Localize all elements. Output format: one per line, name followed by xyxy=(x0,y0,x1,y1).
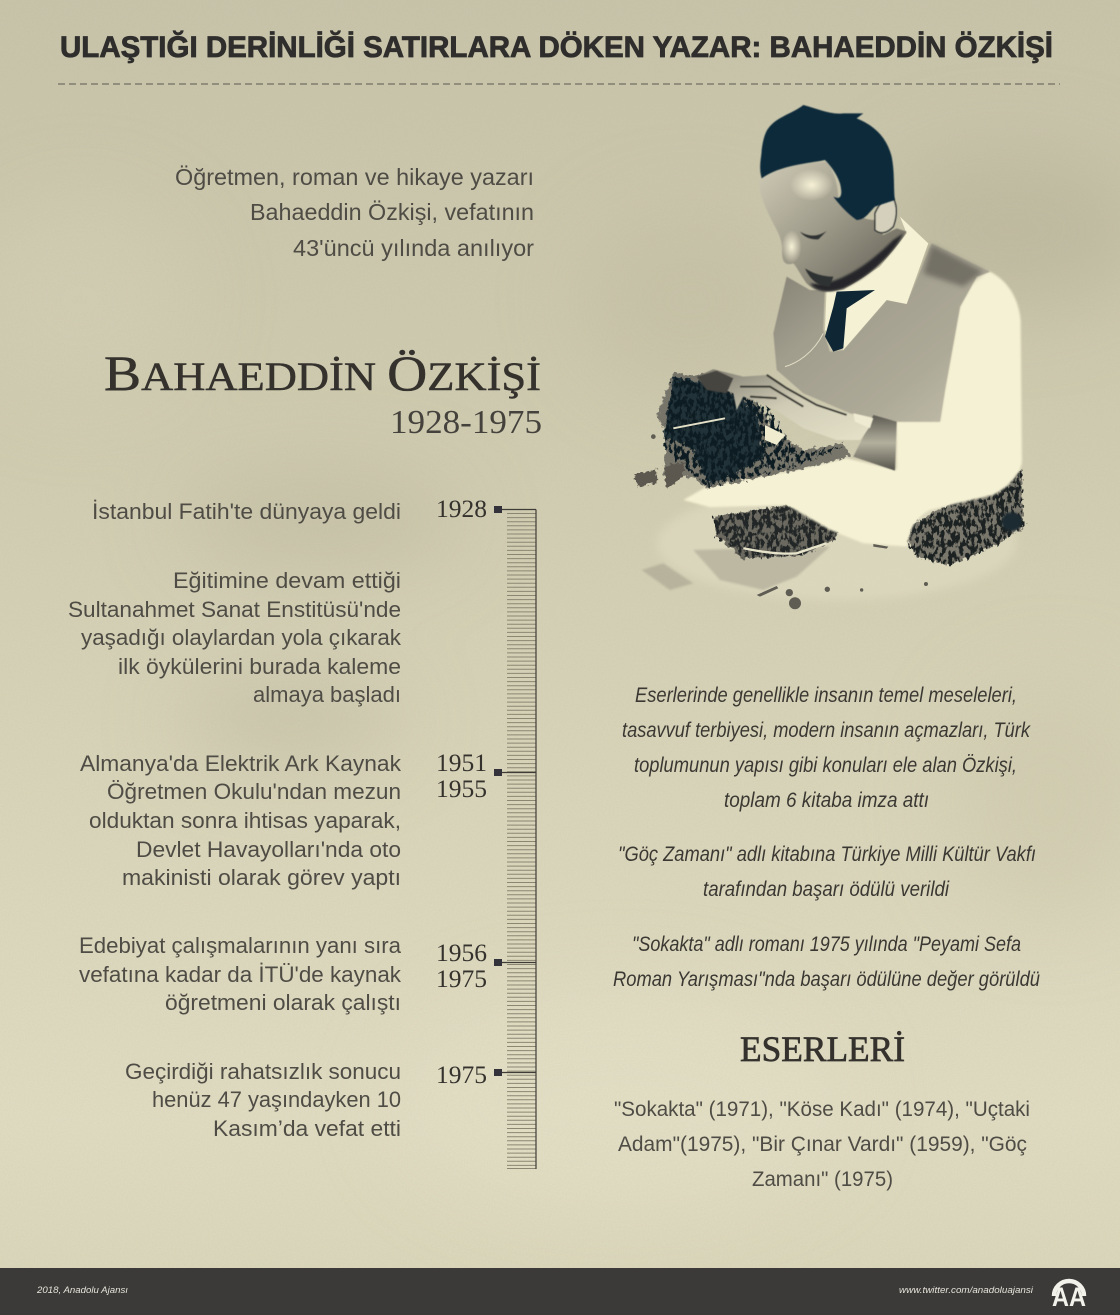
watch xyxy=(853,413,873,428)
shirt xyxy=(683,272,1022,547)
timeline years: 1956 xyxy=(436,940,487,967)
works list: "Sokakta" (1971), "Köse Kadı" (1974), "Uçtaki xyxy=(614,1098,1030,1121)
desk object: right sleeve shadow xyxy=(907,470,1023,565)
text block: themes: tasavvuf terbiyesi, modern insanın açmazları, Türk xyxy=(622,719,1031,742)
dashed title rule xyxy=(58,83,1060,85)
timeline years: 1975 xyxy=(436,966,487,993)
timeline entry: 1975: Geçirdiği rahatsızlık sonucu xyxy=(125,1059,401,1084)
necklace cord xyxy=(785,333,823,367)
social link: www.twitter.com/anadoluajansi xyxy=(899,1285,1034,1295)
timeline entry: education xyxy=(68,568,402,707)
text block: themes xyxy=(622,684,1031,812)
timeline entry: 1951-1955 xyxy=(80,751,402,890)
timeline entry: education: almaya başladı xyxy=(253,682,401,707)
vest xyxy=(773,243,990,422)
timeline entry: 1956-1975: öğretmeni olarak çalıştı xyxy=(165,990,401,1015)
forehead highlight xyxy=(790,169,833,201)
life dates: 1928-1975 xyxy=(390,404,542,441)
faded lower sketch xyxy=(642,547,830,590)
hand xyxy=(697,369,873,440)
timeline entry: birth: İstanbul Fatih'te dünyaya geldi xyxy=(92,499,401,524)
axis and connector lines xyxy=(502,510,536,1169)
timeline years: 1951 xyxy=(436,750,487,777)
intro text: Öğretmen, roman ve hikaye yazarı xyxy=(175,164,534,190)
portrait illustration xyxy=(633,105,1023,609)
timeline years: 1975 xyxy=(436,1062,487,1089)
text block: Sokakta award: Roman Yarışması"nda başarı ödülüne değer görüldü xyxy=(613,968,1040,991)
timeline entry: education: ilk öykülerini burada kaleme xyxy=(118,654,401,679)
works heading: ESERLERİ xyxy=(740,1029,905,1069)
timeline markers xyxy=(494,506,502,1076)
intro text xyxy=(175,164,534,261)
text block: Göç Zamanı award: "Göç Zamanı" adlı kitabına Türkiye Milli Kültür Vakfı xyxy=(618,843,1036,866)
text block: themes: toplam 6 kitaba imza attı xyxy=(724,789,929,812)
nose highlight xyxy=(782,230,802,263)
timeline entry: 1951-1955: Almanya'da Elektrik Ark Kaynak xyxy=(80,751,402,776)
desk object highlight xyxy=(743,543,827,554)
timeline years xyxy=(436,496,487,1089)
ink splashes xyxy=(651,434,928,609)
white patch in the torn texture xyxy=(765,425,785,445)
text block: Sokakta award xyxy=(613,933,1040,991)
intro text: 43'üncü yılında anılıyor xyxy=(293,235,534,261)
timeline entry: 1951-1955: Öğretmen Okulu'ndan mezun xyxy=(107,779,401,804)
jaw shadow xyxy=(810,233,903,291)
timeline entry: 1975 xyxy=(125,1059,401,1141)
works list: Adam"(1975), "Bir Çınar Vardı" (1959), "Göç xyxy=(618,1133,1027,1156)
dark torn texture left of the hand xyxy=(633,373,850,488)
text block: Göç Zamanı award xyxy=(618,843,1036,901)
vest armhole shadow xyxy=(923,245,983,287)
desk object: left xyxy=(713,505,843,558)
timeline years: 1955 xyxy=(436,776,487,803)
footer bar xyxy=(0,1268,1120,1315)
soft paper glow around the lower figure xyxy=(657,487,1017,600)
finger shadows xyxy=(740,375,847,415)
text block: Sokakta award: "Sokakta" adlı romanı 1975 yılında "Peyami Sefa xyxy=(632,933,1021,956)
name heading: BAHAEDDİN ÖZKİŞİ xyxy=(104,345,541,401)
text block: Göç Zamanı award: tarafından başarı ödülü verildi xyxy=(703,878,950,901)
wrist cuff xyxy=(853,415,897,471)
timeline entry: 1956-1975 xyxy=(79,933,402,1015)
icon: Anadolu Agency logo: AA xyxy=(1052,1282,1086,1312)
hair xyxy=(760,105,895,220)
timeline entry: education: Eğitimine devam ettiği xyxy=(173,568,401,593)
timeline entry: 1951-1955: Devlet Havayolları'nda oto xyxy=(136,837,401,862)
timeline entry: 1951-1955: olduktan sonra ihtisas yaparak, xyxy=(89,808,401,833)
timeline axis xyxy=(494,506,536,1169)
text block: themes: Eserlerinde genellikle insanın temel meseleleri, xyxy=(635,684,1017,707)
timeline entry: education: yaşadığı olaylardan yola çıkarak xyxy=(81,625,402,650)
title: ULAŞTIĞI DERİNLİĞİ SATIRLARA DÖKEN YAZAR: BAHAEDDİN ÖZKİŞİ xyxy=(60,30,1053,64)
white pencil xyxy=(673,418,725,428)
collar xyxy=(825,217,928,350)
timeline entry: 1975: henüz 47 yaşındayken 10 xyxy=(152,1087,401,1112)
works list xyxy=(614,1098,1030,1191)
timeline entry: education: Sultanahmet Sanat Enstitüsü'nde xyxy=(68,597,401,622)
face xyxy=(759,162,907,292)
works list: Zamanı" (1975) xyxy=(752,1168,893,1191)
ear xyxy=(875,198,896,233)
timeline entry: 1951-1955: makinisti olarak görev yaptı xyxy=(122,865,401,890)
timeline entry: 1956-1975: vefatına kadar da İTÜ'de kaynak xyxy=(79,962,402,987)
tie xyxy=(825,290,875,352)
hatched column xyxy=(507,514,536,1168)
timeline entry: 1975: Kasım’da vefat etti xyxy=(213,1116,401,1141)
eyes and mouth xyxy=(800,231,833,287)
timeline years: 1928 xyxy=(436,496,487,523)
timeline entry: 1956-1975: Edebiyat çalışmalarının yanı sıra xyxy=(79,933,402,958)
intro text: Bahaeddin Özkişi, vefatının xyxy=(250,199,534,225)
text block: themes: toplumunun yapısı gibi konuları ele alan Özkişi, xyxy=(634,754,1017,777)
copyright: 2018, Anadolu Ajansı xyxy=(36,1285,129,1295)
